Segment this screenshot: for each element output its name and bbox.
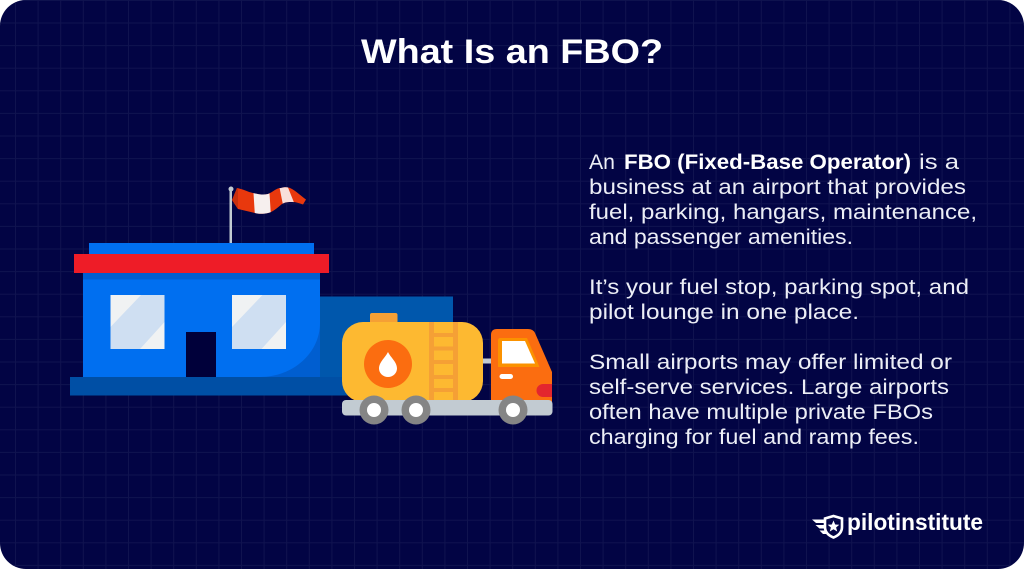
title: What Is an FBO? <box>361 33 663 71</box>
door <box>186 332 216 377</box>
annex block <box>320 296 453 378</box>
chassis <box>342 400 552 416</box>
text block: definition: business at an airport that provides <box>589 176 966 199</box>
connector <box>483 358 492 364</box>
left window <box>110 295 164 349</box>
icon: fuel drop <box>364 340 412 388</box>
text block: definition <box>589 151 977 249</box>
right window <box>232 295 286 349</box>
text block: airport sizes: self-serve services. Large airports <box>589 376 949 399</box>
icon: winged shield <box>812 516 842 538</box>
ground base <box>70 377 355 396</box>
text block: summary <box>589 276 969 324</box>
text block: definition: fuel, parking, hangars, maintenance, <box>589 201 977 224</box>
text block: airport sizes: often have multiple private FBOs <box>589 401 933 424</box>
wheels <box>360 396 528 424</box>
text block: airport sizes <box>589 351 952 449</box>
text block: definition: and passenger amenities. <box>589 226 853 249</box>
text block: airport sizes: Small airports may offer limited or <box>589 351 952 374</box>
text block: airport sizes: charging for fuel and ramp fees. <box>589 426 919 449</box>
logo: pilot institute: pilotinstitute <box>847 509 983 535</box>
icon: windsock <box>232 187 306 214</box>
illustration: FBO building <box>70 185 453 396</box>
text block: definition: FBO (Fixed-Base Operator) <box>624 151 911 174</box>
text block: summary: pilot lounge in one place. <box>589 301 859 324</box>
illustration: fuel truck <box>342 313 552 424</box>
fuel tank <box>342 322 483 402</box>
flag pole <box>228 186 234 243</box>
text block: definition: is a <box>919 151 959 174</box>
red canopy <box>74 254 329 273</box>
text block: summary: It’s your fuel stop, parking spot, and <box>589 276 969 299</box>
tank cap <box>370 313 398 325</box>
building wall <box>83 273 320 377</box>
text block: definition: An <box>589 151 615 174</box>
roof <box>89 243 314 254</box>
truck cab <box>491 329 552 402</box>
ladder <box>429 322 458 400</box>
